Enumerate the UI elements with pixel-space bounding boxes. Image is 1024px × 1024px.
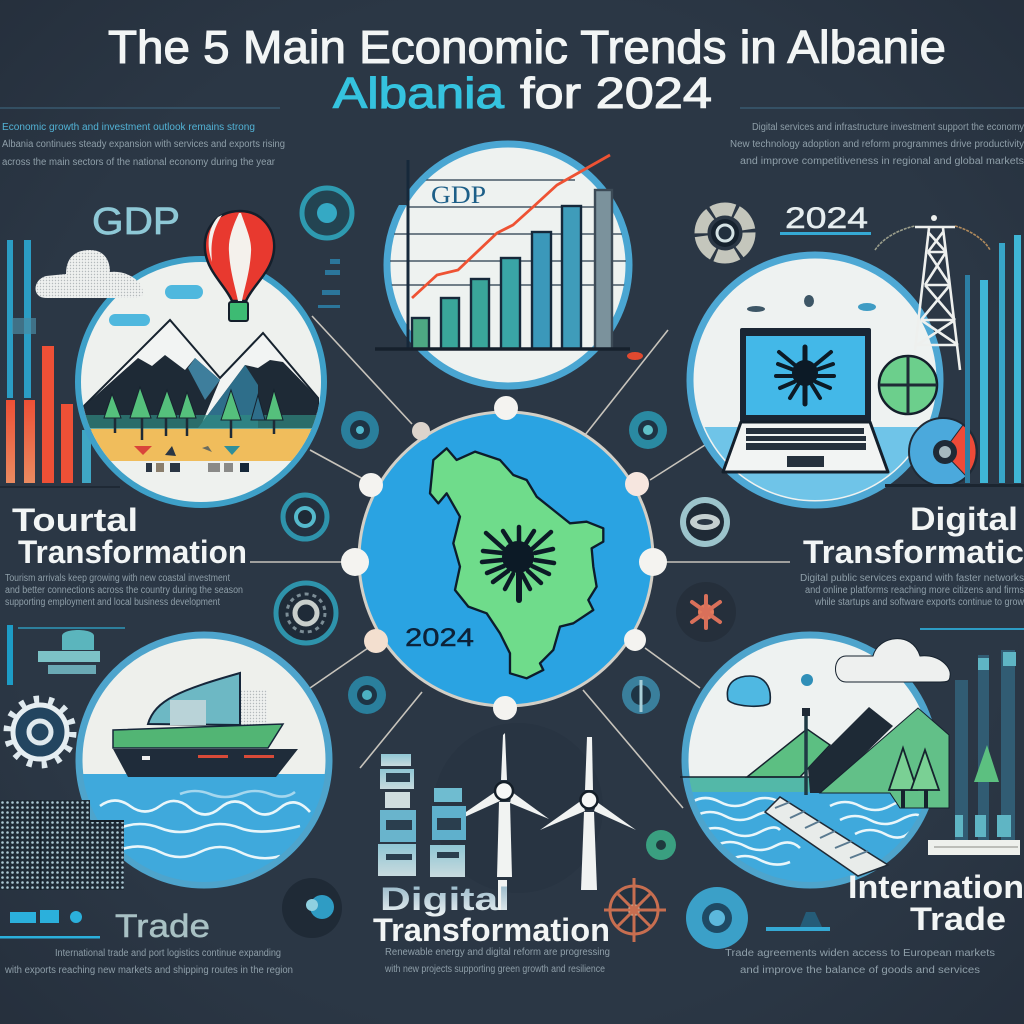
heading: digital transformation bottom: Transformation <box>373 912 610 948</box>
text block: right middle <box>800 573 1024 608</box>
heading: year top right: 2024 <box>785 202 868 235</box>
chart gridlines <box>388 180 628 285</box>
heading: digital transformation bottom: Digital <box>380 881 510 917</box>
panel: left top small ship icon <box>7 625 125 685</box>
panel: right bar decoration <box>885 235 1024 487</box>
pier <box>765 797 888 876</box>
icon: small grey badge <box>680 497 730 547</box>
icon: red blue gauge <box>909 418 977 486</box>
text block: left middle <box>5 573 243 608</box>
green hill right <box>820 708 949 808</box>
decorative small bars <box>318 259 340 308</box>
title: Albania <box>333 69 505 118</box>
connector nodes <box>341 396 667 720</box>
heading: tourism transformation <box>12 502 247 570</box>
text block: bottom right <box>725 948 995 976</box>
icon: upper left teal blob <box>341 411 379 449</box>
heading: tourism transformation: Transformation <box>18 534 247 570</box>
icon: cloud right <box>836 639 950 682</box>
icon: lower left teal blob <box>348 676 386 714</box>
heading: digital transformation right: Transformatic <box>803 534 1024 570</box>
title <box>108 21 946 118</box>
title: The 5 Main Economic Trends in Albanie <box>108 21 946 73</box>
text block: left middle: and better connections across the country during the season <box>5 585 243 596</box>
icon: eagle emblem <box>482 527 554 600</box>
heading: digital transformation bottom <box>373 881 610 948</box>
text block: top left: Albania continues steady expansion with services and exports rising <box>2 139 285 150</box>
icon: orange flower badge <box>676 582 736 642</box>
icon: round badge top <box>302 188 352 238</box>
icon: cog left <box>9 701 71 763</box>
icon: hot air balloon <box>205 211 274 321</box>
panel: GDP chart circle <box>375 144 643 386</box>
beach <box>78 429 323 461</box>
panel: dotted map block <box>0 800 124 890</box>
text block: right middle: Digital public services expand with faster networks <box>800 573 1024 584</box>
panel: coastal circle <box>680 635 950 892</box>
small sky marks <box>747 295 876 312</box>
text block: bottom right: Trade agreements widen access to European markets <box>725 948 995 959</box>
text block: bottom right: and improve the balance of goods and services <box>740 965 980 976</box>
text block: bottom left <box>4 948 293 976</box>
text block: bottom left: with exports reaching new markets and shipping routes in the region <box>4 965 293 976</box>
icon: transmission tower <box>875 215 990 370</box>
text block: top right: New technology adoption and reform programmes drive productivity <box>730 139 1024 150</box>
text block: left middle: Tourism arrivals keep growing with new coastal investment <box>5 573 230 584</box>
icon: dark round badge bottom <box>282 878 342 938</box>
panel: central Albania globe <box>359 412 653 706</box>
small underline mark <box>766 912 830 931</box>
icon: green hex badge <box>646 830 676 860</box>
text block: bottom left: International trade and port logistics continue expanding <box>55 948 281 959</box>
panel: digital laptop circle <box>685 255 945 512</box>
icon: gear badge <box>276 583 336 643</box>
mountains <box>82 320 318 430</box>
panel: shipping circle <box>70 635 340 894</box>
laptop <box>723 328 888 472</box>
chart axes <box>375 160 643 360</box>
small sun mark <box>801 674 813 686</box>
panel: tourism circle <box>78 259 324 505</box>
title: for 2024 <box>520 69 712 118</box>
beach figures <box>134 446 249 472</box>
icon: teal ring badge <box>686 887 748 949</box>
connector lines <box>250 316 790 808</box>
small clouds <box>109 314 150 326</box>
text block: bottom centre <box>384 947 610 975</box>
trees <box>889 748 939 790</box>
waves <box>100 791 310 858</box>
panel: left bar decoration <box>0 240 120 488</box>
text block: top left: across the main sectors of the national economy during the year <box>2 157 276 168</box>
heading: GDP: GDP <box>92 201 180 243</box>
icon: top right gear <box>701 209 749 257</box>
water <box>692 792 922 882</box>
icon: green crosshair badge <box>879 356 937 414</box>
green hill left <box>747 729 830 777</box>
icon: upper right teal blob <box>629 411 667 449</box>
GDP trend line <box>412 155 610 298</box>
text block: top right <box>730 108 1024 167</box>
bar chart <box>412 190 612 349</box>
text block: top left: Economic growth and investment outlook remains strong <box>2 122 255 133</box>
text block: top left <box>0 108 285 168</box>
heading: international trade <box>848 869 1024 937</box>
heading: digital transformation right <box>803 501 1024 570</box>
panel: right buildings decoration <box>920 628 1024 855</box>
icon: ship wheel <box>604 878 666 942</box>
icon: server stacks <box>378 754 466 877</box>
heading: tourism transformation: Tourtal <box>12 502 138 538</box>
text block: left middle: supporting employment and local business development <box>5 597 220 608</box>
map of Albania <box>430 448 603 678</box>
trees <box>104 387 283 420</box>
legend strip <box>0 910 100 938</box>
chart heading: GDP <box>431 182 486 209</box>
text block: top right: and improve competitiveness in regional and global markets <box>740 156 1024 167</box>
heading: international trade: Internation <box>848 869 1024 905</box>
heading: trade: Trade <box>115 908 210 944</box>
icon: ring badge left <box>283 495 327 539</box>
ship <box>113 673 298 777</box>
text block: bottom centre: Renewable energy and digital reform are progressing <box>385 947 610 958</box>
icon: lower right teal blob <box>622 676 660 714</box>
icon: wind farm <box>433 723 636 910</box>
icon: eagle on screen <box>776 347 834 404</box>
keyboard <box>746 428 866 467</box>
small cloud <box>727 676 770 706</box>
dark mountain <box>808 707 893 793</box>
heading: international trade: Trade <box>910 901 1006 937</box>
text block: bottom centre: with new projects supporting green growth and resilience <box>384 964 605 975</box>
heading: digital transformation right: Digital <box>910 501 1018 537</box>
year label: 2024 <box>405 624 474 652</box>
icon: cloud left <box>36 250 143 298</box>
lamp post <box>802 708 810 795</box>
